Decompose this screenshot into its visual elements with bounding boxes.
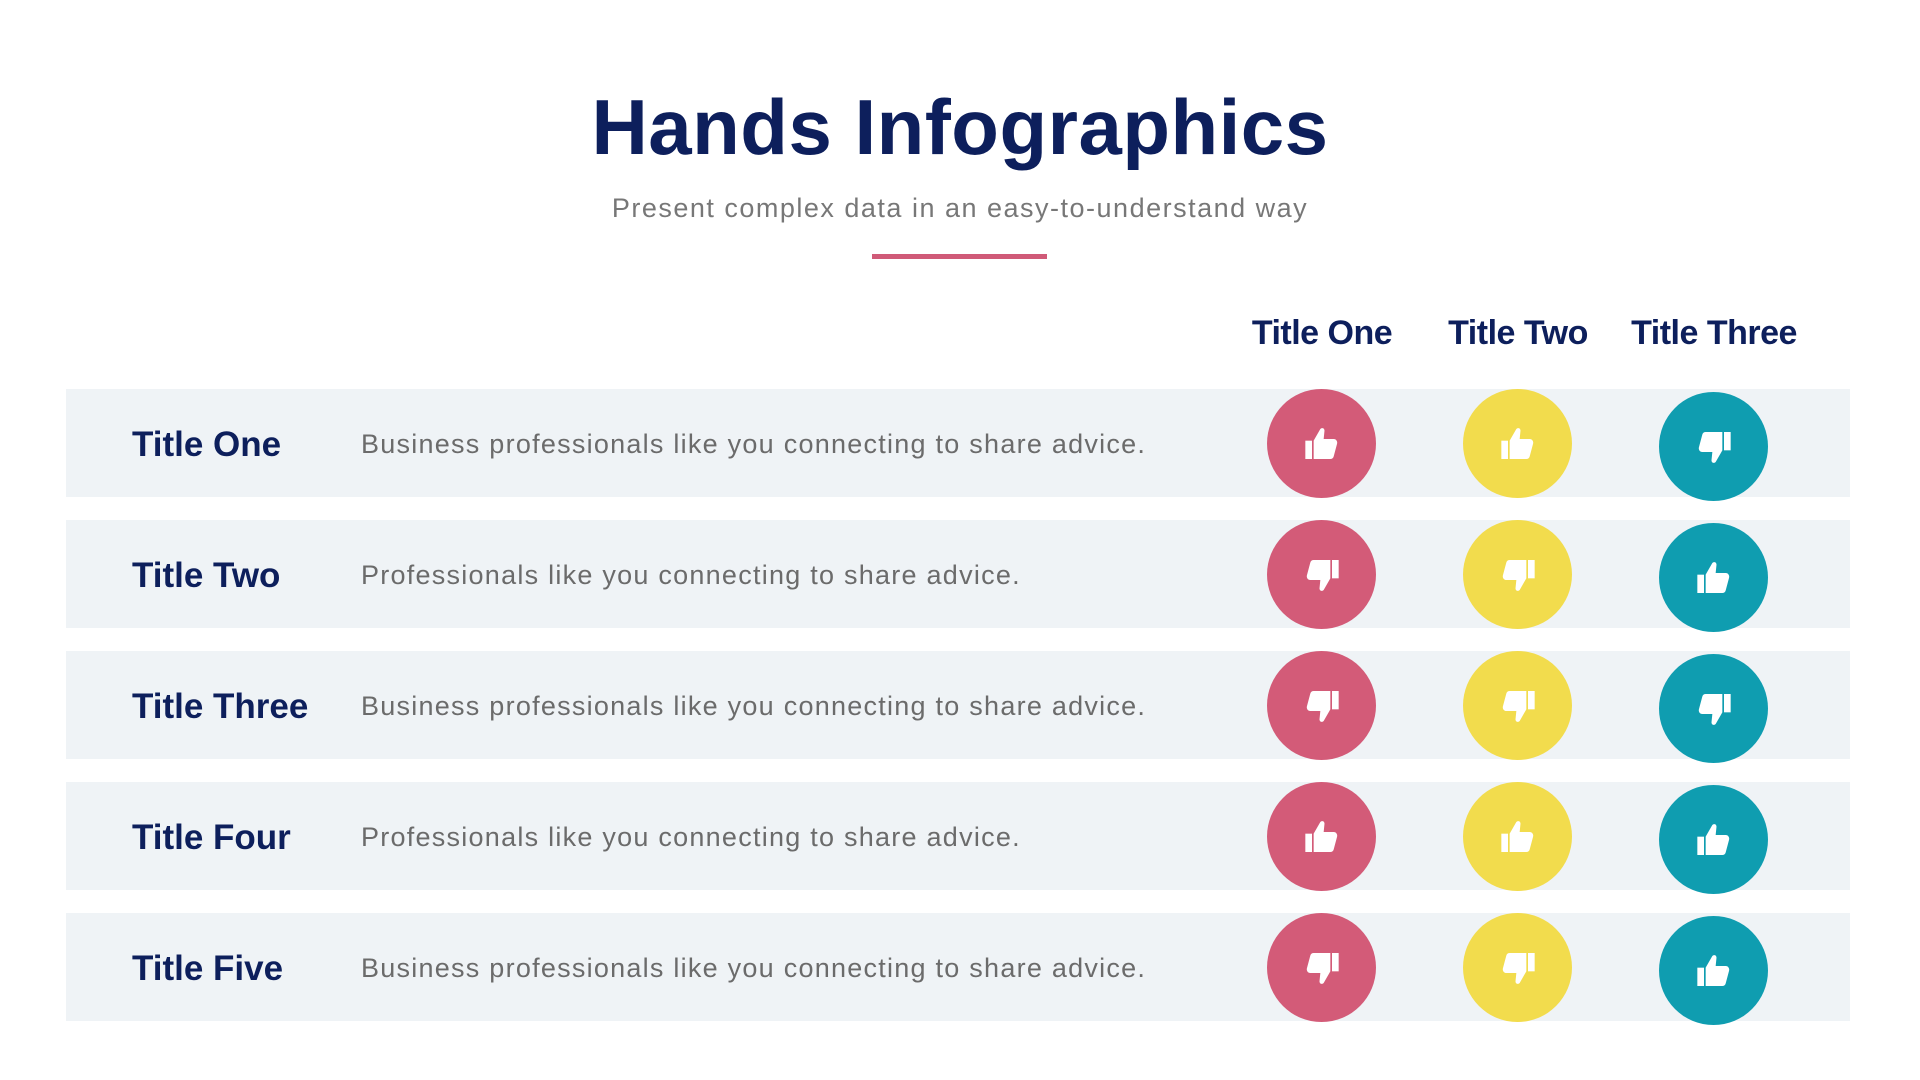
icon: thumbs down teal — [1659, 654, 1768, 763]
row 4 — [66, 782, 1850, 890]
row 2: Professionals like you connecting to share advice. — [361, 560, 1021, 590]
icon: thumbs down yellow — [1463, 651, 1572, 760]
column header: Title One: Title One — [1252, 314, 1392, 352]
column header: Title Two: Title Two — [1448, 314, 1588, 352]
row 3: Title Three — [132, 687, 308, 726]
icon: thumbs down yellow — [1463, 520, 1572, 629]
icon: thumbs up yellow — [1463, 389, 1572, 498]
icon: thumbs up teal — [1659, 785, 1768, 894]
row 2: Title Two — [132, 556, 280, 595]
accent underline — [872, 254, 1047, 259]
row 5: Business professionals like you connecting to share advice. — [361, 953, 1146, 983]
row 1 — [66, 389, 1850, 497]
column header: Title Three: Title Three — [1631, 314, 1797, 352]
row 5 — [66, 913, 1850, 1021]
row 3: Business professionals like you connecting to share advice. — [361, 691, 1146, 721]
row 4: Professionals like you connecting to share advice. — [361, 822, 1021, 852]
subtitle: Present complex data in an easy-to-understand way — [612, 193, 1308, 223]
row 3 — [66, 651, 1850, 759]
icon: thumbs down yellow — [1463, 913, 1572, 1022]
icon: thumbs down teal — [1659, 392, 1768, 501]
title: Hands Infographics — [591, 83, 1329, 171]
row 5: Title Five — [132, 949, 283, 988]
icon: thumbs up teal — [1659, 523, 1768, 632]
row 1: Title One — [132, 425, 281, 464]
icon: thumbs up yellow — [1463, 782, 1572, 891]
icon: thumbs up pink — [1267, 782, 1376, 891]
row 1: Business professionals like you connecting to share advice. — [361, 429, 1146, 459]
icon: thumbs down pink — [1267, 913, 1376, 1022]
icon: thumbs up pink — [1267, 389, 1376, 498]
icon: thumbs down pink — [1267, 651, 1376, 760]
row 2 — [66, 520, 1850, 628]
row 4: Title Four — [132, 818, 291, 857]
icon: thumbs up teal — [1659, 916, 1768, 1025]
icon: thumbs down pink — [1267, 520, 1376, 629]
